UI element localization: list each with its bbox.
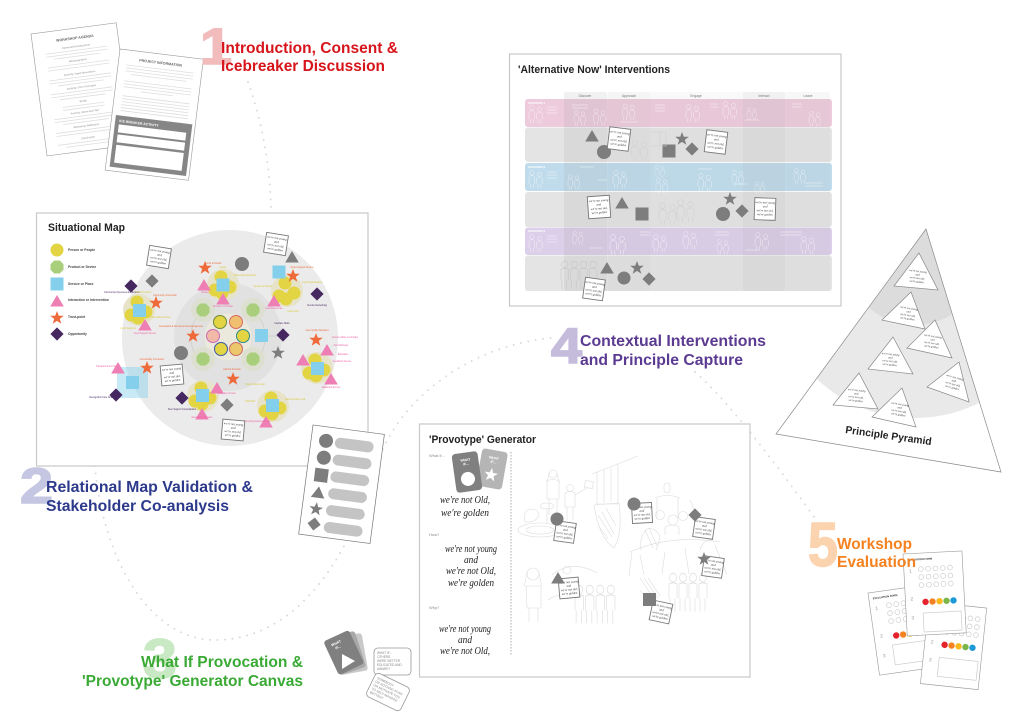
note [649,600,673,624]
small node labels: Feedback Service [333,360,352,363]
journey stage columns: Approach [622,94,636,98]
note: we're not young [267,235,287,242]
note: we're golden [585,291,602,297]
prompt: why: and [458,634,472,646]
small node labels: Doctor & Dentist [205,262,222,265]
small node labels: Lived Experience [265,307,284,310]
note: we're not young [224,421,244,427]
evaluation form: left: EVALUATION FORM [873,593,898,600]
note: and [566,584,572,588]
note: we're golden [591,210,608,215]
principle triangle [882,292,925,329]
sketch: queue of people [561,261,597,289]
scenario 3 storyboard [528,229,814,255]
note: we're not old, [164,374,181,380]
prompt: how: and [464,554,478,566]
document: workshop agenda: Activity: Input Discussion [63,69,96,77]
what if card: circle: WHAT [460,457,471,463]
note: and [169,371,175,375]
small node labels [90,262,358,423]
note: and [231,426,236,430]
journey stage columns: Interact [758,94,770,98]
heading: step 5: Workshop [837,536,912,553]
panel title: Principle Pyramid [845,424,932,448]
principle triangle: and [897,406,902,410]
heading: step 5 [837,536,916,571]
small node labels: Everyday Advocates [192,416,213,419]
note: we're not old, [652,610,670,618]
note: we're not old, [267,242,285,250]
heading: step 1 [221,40,398,75]
scenario 2 storyboard [528,165,823,194]
evaluation form: left: 1 [875,606,879,612]
prompt: how: we're golden [448,577,494,589]
note: we're golden [707,145,724,150]
small node labels: Service Share & Contract [332,336,358,339]
document: project information with ice breaker activity: ICE BREAKER ACTIVITY [119,119,160,128]
note: we're not young [162,366,182,372]
evaluation form: right: EVALUATION FORM [932,606,957,613]
note: we're not young [559,579,579,585]
note: and [596,202,602,207]
note [221,419,245,441]
principle triangle [833,373,878,409]
legend: Service or Place [68,282,94,286]
small node labels: Education [338,353,349,356]
small node labels: Local Organisations [302,281,323,284]
note [702,556,725,578]
card stack: what if cards [323,630,368,675]
response card: motivation: SOMEBODY [376,676,395,688]
response card: motivation: OR NOTHING PUSH [374,680,404,697]
what if card: star [476,448,508,490]
journey stage columns: Engage [690,94,702,98]
small node labels: Community [287,310,300,313]
principle triangle: we're not young [924,334,943,340]
what if card: circle: IF... [463,462,469,466]
evaluation form: left: 2 [880,633,884,640]
small node labels: Transparent Service [96,365,117,368]
principle triangle [927,362,969,402]
prompt: why: Why? [429,605,440,610]
principle triangle: and [930,338,935,342]
heading: step 4: Contextual Interventions [580,333,766,350]
note: we're golden [704,569,721,575]
small node labels: Interface Skills [275,322,290,325]
prompt: why [429,605,491,657]
heading: step 3: What If Provocation & [141,654,303,671]
note: we're not young [707,132,727,139]
scenario 2 storyboard: SCENARIO 2 [528,165,546,169]
small node labels: Care Provider Local [285,398,306,401]
note: we're not young [150,248,170,255]
step number 4: 4 [551,318,582,374]
note: we're not old, [585,287,603,295]
response card: motivation: BETTER? [369,690,384,700]
response card: others: WERE BETTER [377,659,401,663]
response card: others: OTHERS [377,655,390,659]
prompt: what if: What if... [429,453,445,458]
scenario 3 shapes [600,261,656,286]
document: workshop agenda: Conclusion [81,134,96,140]
document: workshop agenda: Break [79,98,88,103]
sketch: queue scene [524,566,615,623]
note: and [763,204,768,209]
card stack: what if cards: WHAT [331,639,343,647]
journey stage columns: Discover [579,94,592,98]
principle triangle: and [854,392,859,396]
sketch: staff and visitors [632,132,666,162]
evaluation form: top: 1 [909,569,912,575]
note: we're golden [225,433,241,438]
heading: step 1: Introduction, Consent & [221,40,398,57]
note: we're not old, [634,512,651,518]
principle triangle: we're golden [882,363,897,367]
note: and [714,137,719,142]
note: we're not young [755,200,776,205]
panel: alternative now interventions [510,54,841,306]
note: and [157,252,162,257]
small node labels: Community Openness & Education [104,291,141,294]
response card: motivation [365,672,411,712]
evaluation form: top: 2 [910,597,914,603]
document: workshop agenda: Activity: Core Concepts [66,83,97,91]
opportunity diamonds [109,279,324,405]
small node labels: Fair Pathways [334,344,349,347]
principle triangle: and [915,273,920,277]
small node labels: Relational Service [322,386,341,389]
note [754,198,776,220]
note [587,195,611,219]
principle triangle: we're golden [848,399,863,403]
principle triangle: we're not young [848,388,866,393]
prompt: how: How? [429,532,440,537]
principle triangle: we're not old, [882,359,898,364]
prompt: how: we're not young [445,543,497,555]
small node labels: Older Person Local [245,383,265,386]
intervention triangles [111,279,338,428]
relational map rings [122,230,338,446]
legend: Product or Device [68,265,96,269]
heading: step 2: Stakeholder Co-analysis [46,498,229,515]
principle triangle: we're golden [909,280,924,284]
legend: Person or People [68,248,95,252]
note: we're not young [610,129,630,136]
small node labels: Community Connection [153,294,178,297]
note: and [659,607,665,612]
small node labels: Spouse or Partner [254,285,273,288]
principle triangle: we're not old, [909,276,925,281]
small node labels: Lived Support Service [134,332,157,335]
document: workshop agenda [31,23,132,156]
principle triangle: we're golden [891,412,906,418]
heading: step 3 [82,654,303,690]
response card: others: AWARE? [377,667,390,671]
central portraits [206,316,250,356]
principle triangle: we're not old, [848,395,864,400]
grey added shapes [145,251,299,412]
prompt: how: we're not Old, [446,565,496,577]
evaluation form: left: 3 [883,653,886,660]
small node labels: Peer Support Consultations [168,408,197,411]
heading: step 2: Relational Map Validation & [46,479,253,496]
small node labels: Nurses [201,291,209,294]
note [554,521,577,543]
prompt: why: we're not Old, [440,645,490,657]
small node labels: Everyday Services [151,316,171,319]
note: we're not old, [707,140,725,148]
sketch shapes [550,498,711,606]
step number 5: 5 [808,511,838,580]
small node labels: Cultural Inclusion [223,368,242,371]
note: and [617,134,622,139]
evaluation form: top [903,551,966,636]
note: and [702,524,707,528]
small node labels: Care Quality Standard [306,329,329,332]
evaluation form: top: 3 [911,615,915,622]
principle triangle: we're not old, [924,341,940,346]
document: workshop agenda: WORKSHOP AGENDA [56,34,94,43]
small node labels: Paid Staff [245,400,255,403]
small node labels: Consultants & Non-Governmental Agencies [159,325,204,328]
note: and [563,528,568,532]
small node labels: Accessibility & Inclusion [140,358,165,361]
evaluation form: right: 3 [929,657,932,664]
note: we're golden [267,246,284,253]
small node labels: Everyday Experience Care [243,420,271,423]
heading: step 2 [46,479,253,515]
note [631,502,653,524]
heading: step 4 [580,333,766,369]
scenario rows [525,99,832,291]
note: we're not young [632,504,652,510]
small node labels: Service Networking [307,304,328,307]
note: we're golden [561,591,578,596]
legend: Interaction or Intervention [68,298,109,302]
note: and [639,509,645,513]
heading: step 5: Evaluation [837,554,916,571]
small node labels: Present or Provider [213,305,233,308]
note: we're not old, [224,429,242,435]
note: we're not young [695,519,715,525]
note: we're golden [652,614,668,621]
importance bands [817,230,979,418]
small node labels: Recognition Care Strategy [90,396,117,399]
principle triangle [894,253,938,290]
legend: Trust-point [68,315,86,319]
principle triangle: we're not old, [945,381,961,388]
response card: others: EDUCATED AND [377,663,402,667]
note: we're not old, [150,255,168,263]
note [160,364,184,386]
principle triangle: we're not young [900,306,919,312]
principle triangle: we're golden [945,385,960,391]
principle triangle: we're not young [946,374,964,382]
sketch: seated group [659,200,694,225]
evaluation form: top: EVALUATION FORM [907,556,932,562]
principle triangle: we're not young [909,269,927,274]
document: project information with ice breaker activity: PROJECT INFORMATION [139,58,183,68]
note: we're golden [150,259,167,266]
journey stage columns: Leave [804,94,813,98]
principle triangle: we're not old, [891,409,907,414]
response card: others: WHAT IF... [377,651,392,655]
sketch: reception scene [518,456,638,548]
prompt: what if [429,453,490,519]
note: we're not young [585,280,605,286]
principle triangle: and [888,356,893,360]
note: we're golden [164,378,181,383]
document: workshop agenda: Personal Introductions [62,42,91,50]
response card: others [374,648,411,675]
note: we're golden [634,516,651,521]
legend: Opportunity [68,332,87,336]
note: we're golden [757,212,773,217]
principle triangle: we're not young [882,352,900,357]
note: we're not young [589,198,609,203]
divider [510,452,512,656]
document: workshop agenda: Warming Brief [69,57,87,63]
note: we're not old, [556,530,574,538]
principle triangle [907,320,952,358]
document: workshop agenda: Workshop Reflection [73,122,100,129]
note: and [711,563,716,567]
what if card: circle [451,451,483,493]
scenario 3 storyboard: SCENARIO 3 [528,229,546,233]
note: we're not young [704,558,724,564]
principle triangle: and [906,310,911,314]
what if card: star: WHAT [489,455,500,461]
prompt: why: we're not young [439,623,491,635]
principle triangle: we're not young [891,402,910,408]
panel title: 'Alternative Now' Interventions [518,64,670,76]
prompt: what if: we're not Old, [440,494,490,506]
note [693,517,716,539]
scenario 1 storyboard [528,101,820,127]
principle triangle [872,388,916,427]
document: workshop agenda: Activity: Show and Tell [70,108,99,115]
card stack: what if cards: IF... [335,644,342,651]
product nodes [191,298,268,371]
note: we're not old, [756,208,774,214]
journey stage columns [564,92,830,291]
principle triangle: we're golden [924,344,939,350]
note: we're not old, [695,526,713,534]
note: we're not old, [610,137,628,145]
evaluation form: right: 2 [930,639,934,646]
note [264,232,288,256]
note [147,245,171,269]
card: provocation shape list [299,425,384,543]
note: we're golden [556,534,573,540]
small node labels: Everyday Service [218,392,237,395]
note: we're not old, [561,587,578,593]
principle triangle: we're not old, [900,313,916,318]
legend [50,244,109,341]
panel title: 'Provotype' Generator [429,434,537,446]
what if card: star: IF... [490,460,496,465]
heading: step 3: 'Provotype' Generator Canvas [82,673,303,690]
note: we're not young [556,523,576,529]
small node labels: Local Pro-Peers [135,291,152,294]
panel title: Situational Map [48,222,125,234]
note [704,130,728,154]
trust-point stars [140,261,323,385]
panel: provotype generator [420,424,750,677]
small node labels: Family [220,267,227,269]
dotted journey path [95,82,822,640]
note: and [274,239,279,244]
note: we're not old, [704,565,722,573]
scenario 1 storyboard: SCENARIO 1 [528,101,546,105]
sketch: meeting scene [629,483,727,611]
principle triangle: we're golden [900,316,915,322]
prompt: what if: we're golden [441,507,489,519]
panel: situational map [36,213,368,466]
note [558,577,580,599]
step number 1: 1 [200,18,232,75]
prompt: how [429,532,497,589]
note: we're not old, [591,206,608,212]
step number 3: 3 [143,627,177,690]
response card: motivation: TO SELF-MANAGE [371,687,398,703]
heading: step 4: and Principle Capture [580,352,743,369]
small node labels: Older Adult Advocate [234,274,256,277]
stakeholder clusters [117,266,333,422]
heading: step 1: Icebreaker Discussion [221,58,385,75]
note: we're golden [695,530,712,536]
principle triangle [868,337,913,374]
step number 2: 2 [20,458,53,514]
note: and [592,285,597,289]
note: we're not young [652,602,673,610]
response card: motivation: OR MOTIVATE YOU [373,683,401,700]
scenario 2 shapes [615,192,749,221]
note [607,127,631,151]
note [583,277,606,301]
panel: principle pyramid [776,228,1002,472]
evaluation form: right [920,602,987,690]
document: project information with ice breaker activity [105,49,203,180]
small node labels: Smart Support Service [290,266,314,269]
scenario 1 shapes [585,130,699,159]
principle triangle: and [951,379,957,383]
note: we're golden [610,142,627,147]
evaluation form: left [868,585,934,675]
small node labels: Local Supports [120,327,137,330]
